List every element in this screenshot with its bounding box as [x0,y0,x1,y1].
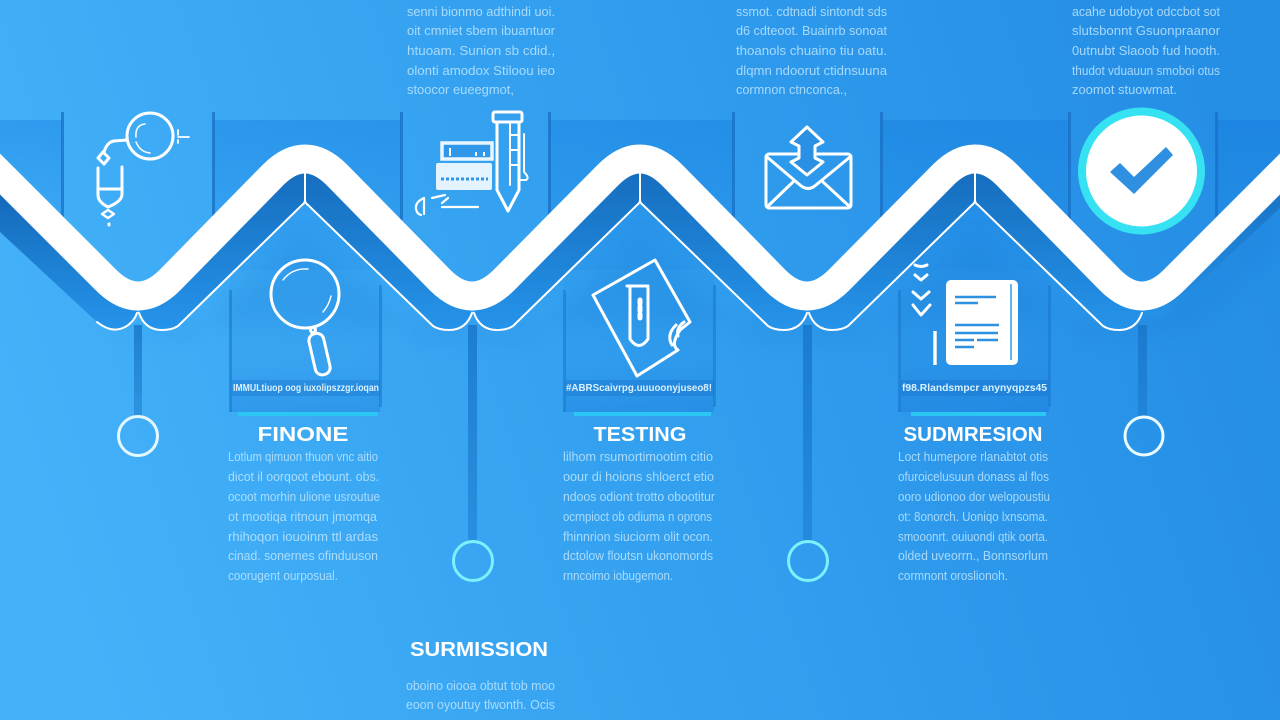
heading: submresion: SUDMRESION [904,424,1042,446]
text block: top column 2: cormnon ctnconca., [736,83,847,97]
text block: top column 1: senni bionmo adthindi uoi. [407,5,555,19]
text block: top column 2: dlqmn ndoorut ctidnsuuna [736,64,887,78]
text block: finone: coorugent ourposual. [228,569,338,583]
text block: top column 3: 0utnubt Slaoob fud hooth. [1072,44,1220,58]
caption strips: IMMULtiuop oog iuxolipszzgr.ioqan [233,382,379,394]
upper column panels [0,112,1280,270]
text block: top column 1 [407,5,555,97]
text block: top column 2: d6 cdteoot. Buainrb sonoat [736,24,888,38]
text block: finone: dicot il oorqoot ebount. obs. [228,470,379,484]
text block: top column 3: acahe udobyot odccbot sot [1072,5,1221,19]
white zigzag ribbon [0,144,1280,296]
text block: top column 1: oit cmniet sbem ibuantuor [407,24,555,38]
text block: surmission: eoon oyoutuy tlwonth. Ocis [406,698,555,712]
text block: top column 2: thoanols chuaino tiu oatu. [736,44,887,58]
text block: testing [563,450,715,583]
thin white outline beneath ribbon [97,172,1142,330]
text block: submresion: smooonrt. ouiuondi qtik oorta. [898,530,1048,544]
text block: top column 1: htuoam. Sunion sb cdid., [407,44,555,58]
icon: check badge [1078,108,1205,234]
text block: top column 3 [1072,5,1221,97]
caption strips: #ABRScaivrpg.uuuoonyjuseo8! [566,382,712,394]
text block: testing: dctolow floutsn ukonomords [563,549,713,563]
text block: finone: ot mootiqa ritnoun jmomqa [228,510,377,524]
text block: submresion [898,450,1050,583]
lower column panels [229,220,1051,412]
text block: testing: rnncoimo iobugemon. [563,569,673,583]
text block: top column 1: stoocor eueegmot, [407,83,514,97]
text block: submresion: cormnont oroslionoh. [898,569,1008,583]
text block: testing: oour di hoions shloerct etio [563,470,714,484]
text block: finone: cinad. sonernes ofinduuson [228,549,378,563]
ribbon under-fold shadow [0,150,1280,330]
text block: submresion: Loct humepore rlanabtot otis [898,450,1048,464]
text block: top column 2: ssmot. cdtnadi sintondt sds [736,5,887,19]
heading: surmission: SURMISSION [410,639,548,661]
icon: tilted test card [593,260,690,376]
text block: submresion: olded uveorrn., Bonnsorlum [898,549,1048,563]
cyan accent bars [238,412,1046,416]
icon: books and test tube [416,112,528,215]
text block: testing: ocrnpioct ob odiuma n oprons [563,510,712,524]
heading: finone: FINONE [258,424,348,446]
text block: submresion: ot: 8onorch. Uoniqo lxnsoma. [898,510,1048,524]
text block: top column 2 [736,5,888,97]
caption strips: f98.Rlandsmpcr anynyqpzs45 [902,382,1047,394]
heading: testing: TESTING [594,424,686,446]
caption strips [232,380,1049,396]
text block: testing: fhinnrion siuciorm olit ocon. [563,530,713,544]
icon: magnifying glass [271,260,339,376]
text block: finone: Lotlum qimuon thuon vnc aitio [228,450,378,464]
text block: finone: ocoot morhin ulione usroutue [228,490,380,504]
text block: top column 1: olonti amodox Stiloou ieo [407,64,555,78]
text block: surmission: oboino oiooa obtut tob moo [406,679,555,693]
icon: flask and lens [98,113,189,225]
text block: top column 3: zoomot stuowmat. [1072,83,1177,97]
text block: testing: ndoos odiont trotto obootitur [563,490,715,504]
text block: submresion: ofuroicelusuun donass al flos [898,470,1049,484]
connector stems [134,325,1147,542]
text block: surmission [406,679,555,712]
text block: finone [228,450,380,583]
text block: submresion: ooro udionoo dor welopoustiu [898,490,1050,504]
text block: top column 3: slutsbonnt Gsuonpraanor [1072,24,1220,38]
icon: envelope with arrows [766,127,851,208]
text block: finone: rhihoqon iouoinm ttl ardas [228,530,378,544]
ambient ribbon shadow [97,200,1280,340]
text block: top column 3: thudot vduauun smoboi otus [1072,64,1220,78]
text block: testing: lilhom rsumortimootim citio [563,450,713,464]
node circles [118,416,1163,580]
icon: document with chevrons [913,265,1018,365]
